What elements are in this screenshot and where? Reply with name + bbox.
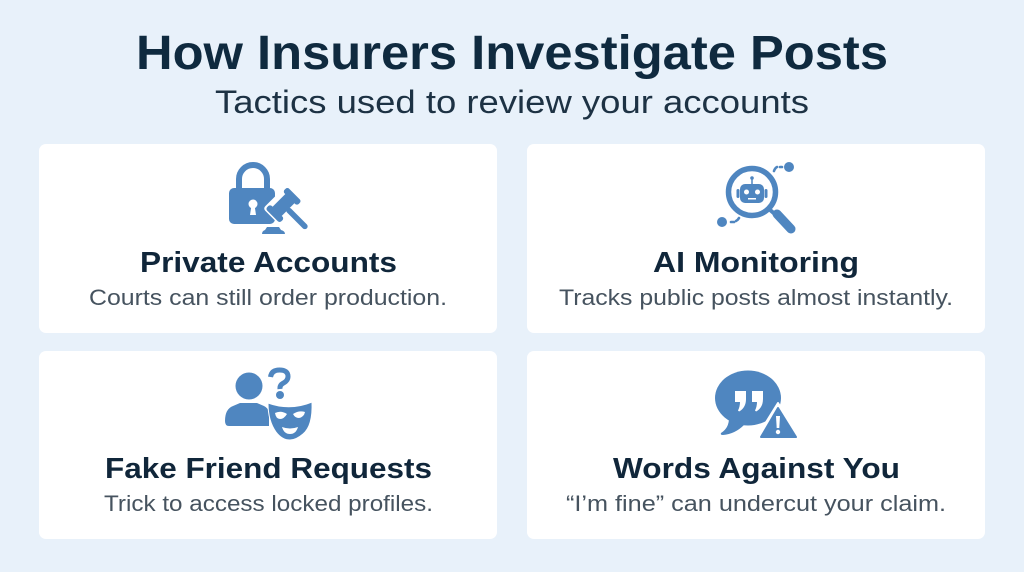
subtitle: Tactics used to review your accounts (215, 84, 809, 120)
text: words against you: “I’m fine” can undercut your claim. (566, 491, 946, 516)
heading: private accounts: Private Accounts (140, 247, 397, 279)
title: How Insurers Investigate Posts (136, 27, 888, 80)
panel: words against you (527, 351, 985, 539)
icon: person, question mark and mask (225, 370, 312, 440)
text: ai monitoring: Tracks public posts almost instantly. (559, 285, 953, 310)
text: fake friend requests: Trick to access locked profiles. (104, 491, 433, 516)
icon: padlock and gavel (229, 165, 319, 240)
panel: private accounts (39, 144, 497, 333)
text: private accounts: Courts can still order production. (89, 285, 447, 310)
heading: fake friend requests: Fake Friend Requests (105, 453, 432, 485)
panel: fake friend requests (39, 351, 497, 539)
heading: words against you: Words Against You (613, 453, 900, 485)
icon: speech bubble with warning triangle (715, 370, 801, 440)
icon: robot in magnifying glass (717, 162, 794, 229)
heading: ai monitoring: AI Monitoring (653, 247, 859, 279)
panel: ai monitoring (527, 144, 985, 333)
